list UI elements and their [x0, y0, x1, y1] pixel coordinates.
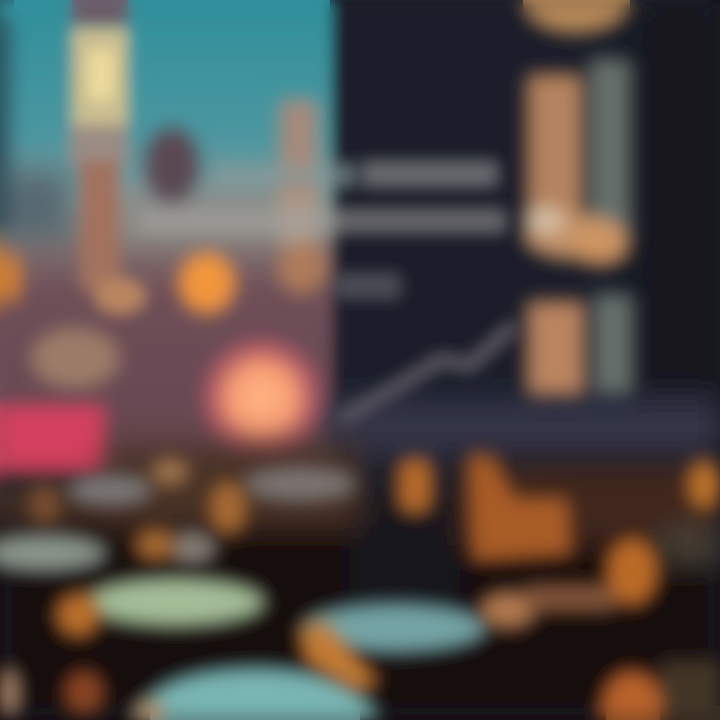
front teal table	[135, 668, 378, 720]
glowing orange lamps	[0, 252, 235, 313]
soft haze	[0, 170, 320, 240]
table tops grey	[0, 468, 356, 571]
left beige block	[31, 328, 119, 388]
left tower	[70, 0, 146, 314]
central tower	[278, 100, 326, 294]
right columns	[523, 0, 632, 394]
lower dark floor	[0, 445, 720, 720]
green table	[85, 578, 265, 626]
orange table rims and furniture	[0, 455, 720, 720]
peach sun glow	[192, 328, 332, 468]
right dark areas	[320, 0, 720, 455]
red panel	[0, 405, 105, 473]
heading text smudges	[140, 162, 505, 298]
left dark edge	[0, 20, 10, 230]
tables	[0, 455, 720, 720]
trend line smudge	[340, 325, 515, 420]
teal table	[303, 604, 487, 652]
dark block by tower	[144, 127, 200, 203]
sky and haze panel	[0, 0, 332, 470]
